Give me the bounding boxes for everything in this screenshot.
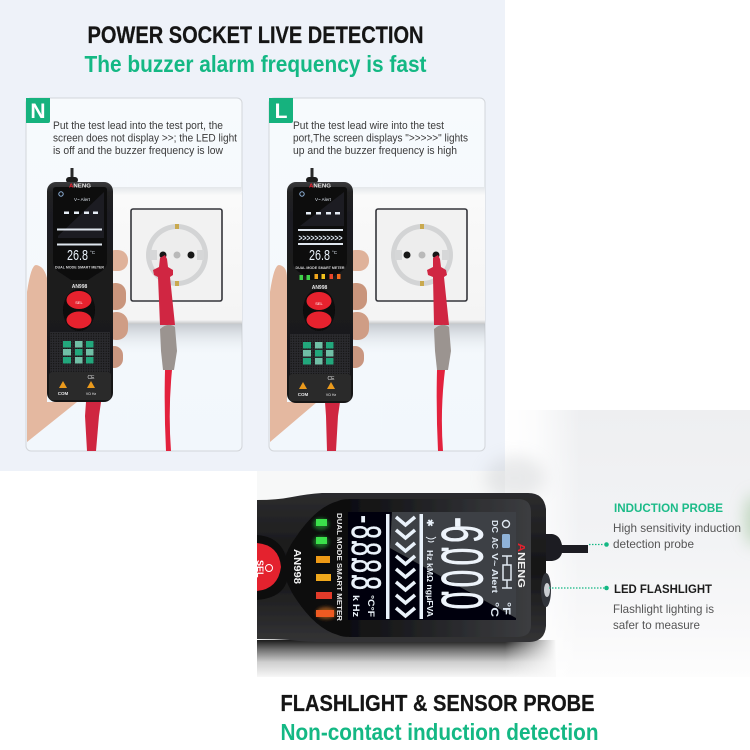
model label AN998: AN998 <box>291 549 303 584</box>
flashlight lens <box>541 573 551 607</box>
test probe: N <box>153 255 177 451</box>
leader line: LED flashlight <box>549 586 609 590</box>
badge: L: L <box>275 100 288 123</box>
text: L description: port,The screen displays ">>>>>" lights <box>293 132 468 144</box>
meter: L: >>>>>>>>>>> <box>298 233 342 243</box>
meter: N: COM <box>58 391 68 396</box>
meter: L: SEL <box>315 301 324 306</box>
meter: L: CE <box>328 376 335 382</box>
text: N description: screen does not display >>; the LED light <box>53 132 238 144</box>
LCD main reading: -6.00.0 <box>430 517 494 610</box>
label: dual mode smart meter: DUAL MODE SMART METER <box>335 513 344 622</box>
text: LED flashlight description: safer to measure <box>613 618 700 632</box>
LCD unit labels: temperature and frequency: k Hz <box>350 595 361 617</box>
meter face <box>284 499 531 637</box>
brand label ANENG: A NENG <box>515 543 526 588</box>
meter: N: AN998 <box>72 284 87 290</box>
meter: L: °C <box>332 250 338 255</box>
panel: N neutral test <box>26 98 242 451</box>
badge: L <box>269 98 293 123</box>
subtitle: buzzer alarm frequency: The buzzer alarm frequency is fast <box>84 51 427 77</box>
text: N description: Put the test lead into the test port, the <box>53 120 223 132</box>
panel: L live test <box>269 98 485 451</box>
LCD chevron bargraph <box>396 517 415 616</box>
meter: N: SEL <box>75 300 84 305</box>
screen gloss <box>390 512 516 618</box>
text: N description: is off and the buzzer frequency is low <box>53 145 224 157</box>
LED indicators <box>313 518 336 619</box>
text: LED flashlight description: Flashlight lighting is <box>613 602 714 616</box>
LCD mode labels: DC <box>490 520 500 533</box>
LCD mode labels: AC <box>490 537 500 549</box>
red test lead: L <box>325 402 340 451</box>
meter: N: V~ Alert <box>74 197 91 202</box>
meter: L: 26.8 <box>309 247 330 264</box>
wall socket: L <box>353 187 485 356</box>
LCD unit labels: temperature and frequency <box>350 595 376 617</box>
meter: L: ANENG <box>309 184 331 190</box>
heading: induction probe: INDUCTION PROBE <box>614 501 723 515</box>
title: flashlight and sensor probe: FLASHLIGHT & SENSOR PROBE <box>280 690 594 716</box>
callout: LED flashlight <box>549 582 717 632</box>
hand: L <box>270 250 369 442</box>
LCD screen <box>348 512 516 620</box>
badge: N <box>26 98 50 123</box>
LCD measurement units <box>425 519 436 617</box>
text: L description: up and the buzzer frequency is high <box>293 145 457 157</box>
callout: induction probe <box>589 501 744 551</box>
power button: SEL <box>255 560 265 578</box>
meter: L <box>287 168 353 403</box>
LCD mode labels: °C <box>488 602 500 617</box>
meter: N: °C <box>90 250 96 255</box>
meter: N: VΩ Hz <box>86 392 96 396</box>
badge: N: N <box>30 100 46 123</box>
title: power socket live detection: POWER SOCKET LIVE DETECTION <box>88 22 424 49</box>
meter: N: CE <box>88 375 95 381</box>
meter: L: DUAL MODE SMART METER <box>296 265 345 270</box>
text: L description: Put the test lead wire into the test <box>293 120 445 132</box>
meter: N: DUAL MODE SMART METER <box>55 264 104 270</box>
photo backdrop: flashlight section <box>257 410 750 677</box>
LCD measurement units: Hz kMΩ ngμFVA <box>425 550 435 617</box>
probe tip <box>544 534 588 561</box>
test probe: L <box>427 255 451 451</box>
LCD measurement units: ✱ <box>425 519 435 527</box>
background: lavender top section <box>0 0 505 471</box>
meter: L: V~ Alert <box>315 197 332 202</box>
LCD divider bars <box>386 514 423 619</box>
meter: L: COM <box>298 392 308 397</box>
LCD mode labels: °F <box>500 602 512 615</box>
text: induction probe description: detection probe <box>613 537 694 551</box>
LCD unit labels: temperature and frequency: °C°F <box>365 595 376 617</box>
meter: L: VΩ Hz <box>326 393 336 397</box>
subtitle: non-contact induction detection: Non-contact induction detection <box>280 719 598 745</box>
LCD small reading: -8.8.8.8 <box>342 515 388 590</box>
meter: N <box>47 168 113 402</box>
leader line: induction probe <box>589 542 609 547</box>
text: induction probe description: High sensitivity induction <box>613 521 741 535</box>
meter: N: ANENG <box>69 184 91 190</box>
meter: L: AN998 <box>312 285 327 291</box>
hand: N <box>27 250 128 442</box>
meter body <box>257 493 546 642</box>
large meter close-up <box>255 493 588 642</box>
meter: N: 26.8 <box>67 247 88 264</box>
LCD mode labels <box>488 520 512 617</box>
LCD mode labels: V~ Alert <box>490 553 500 593</box>
red test lead: N <box>85 402 101 451</box>
wall socket: N <box>113 187 242 356</box>
heading: LED flashlight: LED FLASHLIGHT <box>614 582 713 596</box>
power button <box>255 535 288 600</box>
